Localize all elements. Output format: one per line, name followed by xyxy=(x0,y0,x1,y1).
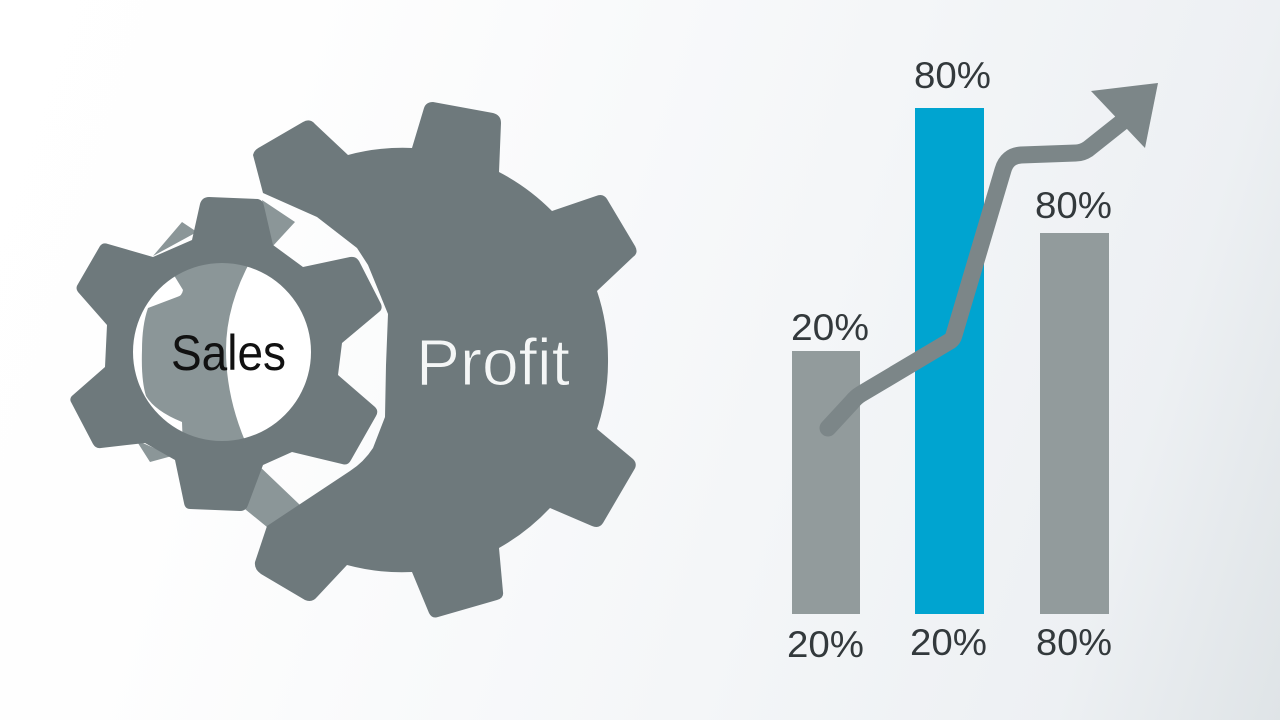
top labels xyxy=(791,55,1112,348)
bar chart xyxy=(787,55,1112,665)
label: Profit: Profit xyxy=(416,325,570,399)
small gear body xyxy=(70,197,382,511)
bottom labels: 20% xyxy=(910,622,987,663)
large gear body xyxy=(253,102,637,618)
top labels: 80% xyxy=(1035,185,1112,226)
small gear group: Sales xyxy=(70,197,382,527)
gear hole background xyxy=(130,260,314,444)
bar 3 xyxy=(1040,233,1109,614)
top labels: 20% xyxy=(791,307,869,348)
large gear group: Profit xyxy=(253,102,637,618)
arrow line xyxy=(828,122,1122,428)
bar 2 highlighted xyxy=(915,108,984,614)
label: Sales: Sales xyxy=(171,325,286,381)
trend arrow xyxy=(828,83,1158,428)
bar 1 xyxy=(792,351,860,614)
arrow head xyxy=(1091,83,1158,148)
bottom labels: 20% xyxy=(787,624,864,665)
top labels: 80% xyxy=(914,55,991,96)
bottom labels: 80% xyxy=(1036,622,1112,663)
bottom labels xyxy=(787,622,1112,665)
rear gear teeth xyxy=(136,200,300,527)
rear gear seen through the hole xyxy=(142,255,252,450)
